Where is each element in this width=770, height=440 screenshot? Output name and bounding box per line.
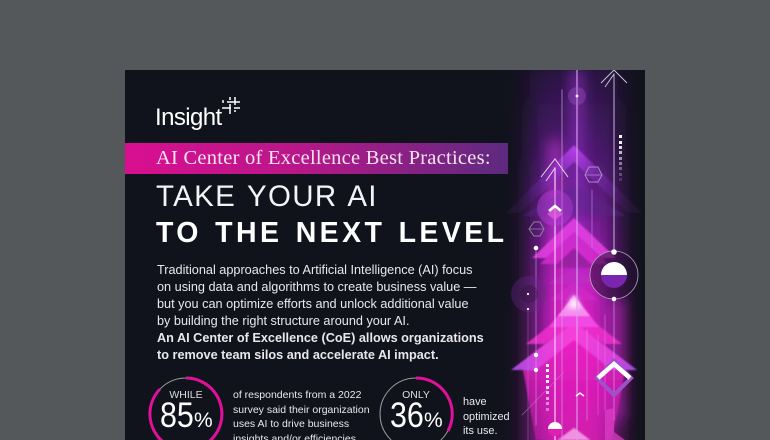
intro paragraph: An AI Center of Excellence (CoE) allows organizations [157,331,484,345]
small half circle [548,422,562,429]
intro paragraph: by building the right structure around your AI. [157,314,410,328]
top right arrowhead [601,70,627,87]
stat number 85: % [194,409,213,432]
stat number 36: % [424,409,443,432]
stat number 36: 36 [390,396,424,435]
title [156,180,507,249]
hexagons [585,167,602,182]
stat description 36 [463,396,510,437]
title: TAKE YOUR AI [156,180,378,213]
stat: while 85%: WHILE [169,389,203,401]
panel: dark card [125,70,645,440]
mid arrowhead [541,159,568,181]
stat description 85: uses AI to drive business [233,418,349,430]
stat number 85: 85 [160,396,194,435]
main lower chevrons [523,340,625,440]
stat description 36: its use. [463,425,498,437]
stat description 85: of respondents from a 2022 [233,389,361,401]
left dim target [511,276,547,312]
intro paragraph: on using data and algorithms to create business value — [157,280,476,294]
halo and chevron icon [537,190,573,226]
stat number 85 [160,396,213,435]
stat number 36 [390,396,443,435]
stat: only 36%: ONLY [402,389,430,401]
stat description 85 [233,389,370,440]
dots [534,246,538,250]
right big chevron diamond [597,361,631,395]
intro paragraph [157,263,484,362]
logo mark [222,97,240,114]
intro paragraph: to remove team silos and accelerate AI impact. [157,348,439,362]
intro paragraph: Traditional approaches to Artificial Intelligence (AI) focus [157,263,472,277]
banner text: AI Center of Excellence Best Practices: [156,147,491,169]
stat ring: 36% [380,376,454,440]
ringed half circle [590,251,638,299]
decorative artwork: glowing purple arrows [507,70,641,440]
logo wordmark: Insight [155,104,222,131]
stat description 36: have [463,396,487,408]
stat description 85: survey said their organization [233,404,370,416]
banner [125,143,508,174]
title: TO THE NEXT LEVEL [156,217,507,249]
upper chevrons [506,145,642,440]
intro paragraph: but you can optimize efforts and unlock additional value [157,297,469,311]
stat description 36: optimized [463,411,510,423]
stat ring: 85% [148,376,224,440]
vertical lines [522,70,614,440]
